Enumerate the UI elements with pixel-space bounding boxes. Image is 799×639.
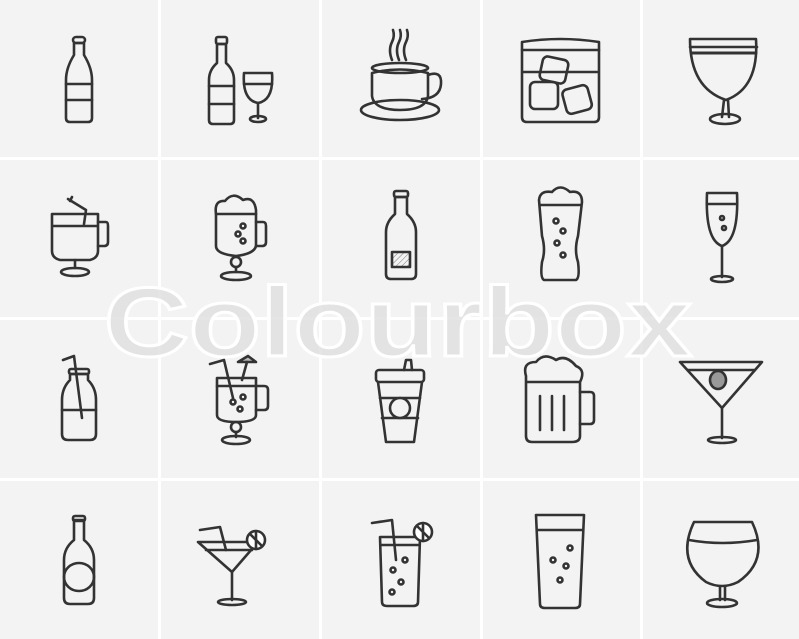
icon: whiskey glass with ice bbox=[522, 39, 599, 122]
icon: tall glass with straw and lemon bbox=[372, 520, 432, 606]
icon: bottle with oval label bbox=[64, 516, 94, 604]
icon: coffee cup bbox=[361, 30, 441, 120]
icon: champagne flute bbox=[707, 193, 737, 282]
icon: bottle with straw bbox=[62, 356, 96, 440]
icon: beer pint bbox=[539, 188, 582, 280]
icon: bottle bbox=[66, 37, 92, 122]
icon: martini with olive bbox=[680, 362, 762, 443]
icon: bottle with label bbox=[386, 191, 416, 279]
icon: margarita with lemon bbox=[198, 527, 265, 605]
icon: takeaway cup bbox=[376, 360, 424, 442]
icon: wine bottle and glass bbox=[209, 37, 272, 124]
icon: mug with straw on stem bbox=[52, 197, 108, 276]
icon: beer mug bbox=[525, 356, 594, 442]
icon: brandy snifter bbox=[687, 522, 758, 607]
icon: tall glass bbox=[536, 515, 584, 608]
icon: mug with umbrella bbox=[210, 356, 268, 444]
watermark: Colourbox bbox=[104, 267, 692, 377]
icon: irish coffee mug bbox=[216, 196, 266, 280]
icon: wine glass wide bbox=[690, 39, 757, 124]
